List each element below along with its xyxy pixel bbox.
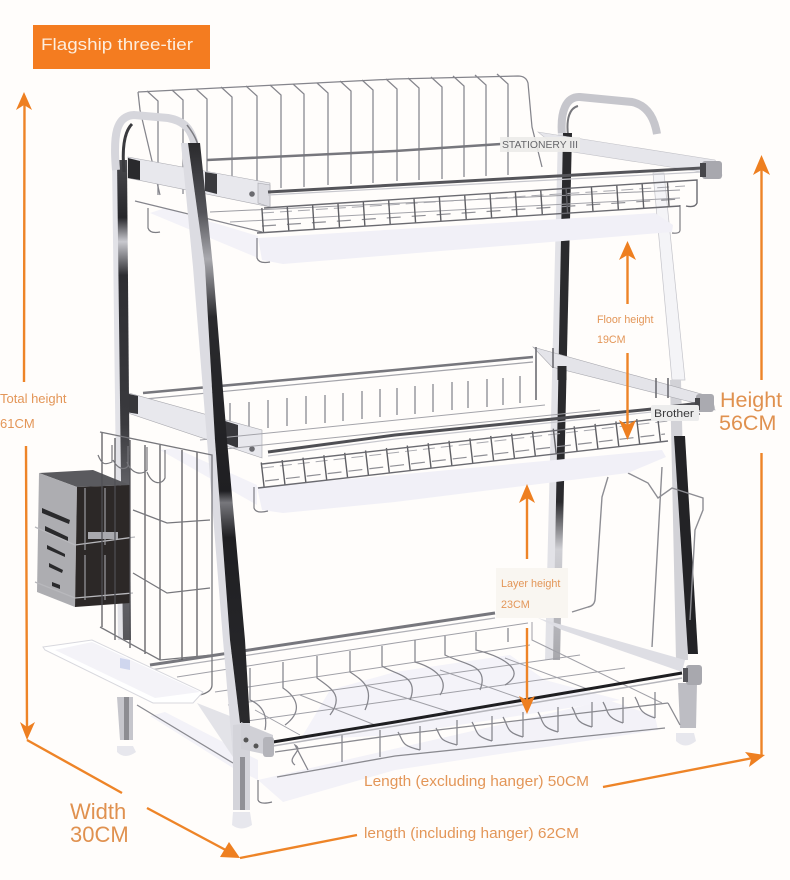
label: length excluding hanger: Length (excluding hanger) 50CM xyxy=(364,774,589,790)
arrow: height xyxy=(753,155,770,755)
label: layer height: Layer height xyxy=(501,578,560,590)
label: height xyxy=(719,388,782,435)
label: width: Width xyxy=(70,799,126,824)
label: stationery: STATIONERY III xyxy=(502,140,578,151)
middle tier wire basket xyxy=(200,403,700,488)
hanger drip tray xyxy=(43,640,203,703)
right side hanger wires xyxy=(572,467,703,647)
arrow: layer height xyxy=(519,484,535,714)
label: total height xyxy=(0,391,67,431)
arrow: total height xyxy=(16,92,35,740)
label: brother: Brother xyxy=(654,408,694,420)
knife and utensil holder xyxy=(35,470,135,607)
title banner xyxy=(33,25,210,69)
dish rack product illustration xyxy=(35,74,722,828)
label: width xyxy=(70,799,129,847)
back plate rack, top tier xyxy=(138,74,542,195)
rubber feet xyxy=(117,733,696,828)
label: floor height: 19CM xyxy=(597,334,626,346)
label: total height: 61CM xyxy=(0,416,35,431)
middle tier back rails and side bars xyxy=(125,347,715,458)
label backing patches xyxy=(496,137,699,618)
right rear frame arch and post xyxy=(545,97,657,660)
bottom tier wavy wire basket xyxy=(137,622,682,803)
label: height: 56CM xyxy=(719,411,776,435)
label: layer height xyxy=(501,578,560,611)
label: height: Height xyxy=(720,388,782,412)
arrow: width xyxy=(27,740,240,858)
right front diagonal upright xyxy=(653,173,698,728)
bottom tier drip trays xyxy=(150,655,658,802)
middle tier drip tray xyxy=(160,448,666,513)
arrow: length including hanger xyxy=(240,835,357,858)
bottom tier end cap xyxy=(683,665,702,685)
front left arch frame xyxy=(115,115,198,172)
bottom tier side bars and back rails xyxy=(150,613,685,757)
label: floor height xyxy=(597,314,653,346)
middle tier end cap xyxy=(695,394,714,412)
top tier wire basket xyxy=(135,168,702,233)
label: width: 30CM xyxy=(70,822,129,847)
arrow: floor height xyxy=(619,241,636,440)
top tier drip tray xyxy=(148,205,680,264)
front left diagonal upright and leg xyxy=(181,143,274,810)
left rear post and leg xyxy=(112,160,133,740)
arrow: length excluding hanger xyxy=(603,752,765,787)
label: layer height: 23CM xyxy=(501,599,530,611)
utensil hanger rack xyxy=(98,432,212,702)
label: floor height: Floor height xyxy=(597,314,653,326)
label: length including hanger: length (including hanger) 62CM xyxy=(364,826,579,842)
label: total height: Total height xyxy=(0,391,67,406)
title banner: Flagship three-tier xyxy=(41,35,193,54)
top tier side bars xyxy=(128,132,722,207)
top tier end cap xyxy=(700,161,722,179)
